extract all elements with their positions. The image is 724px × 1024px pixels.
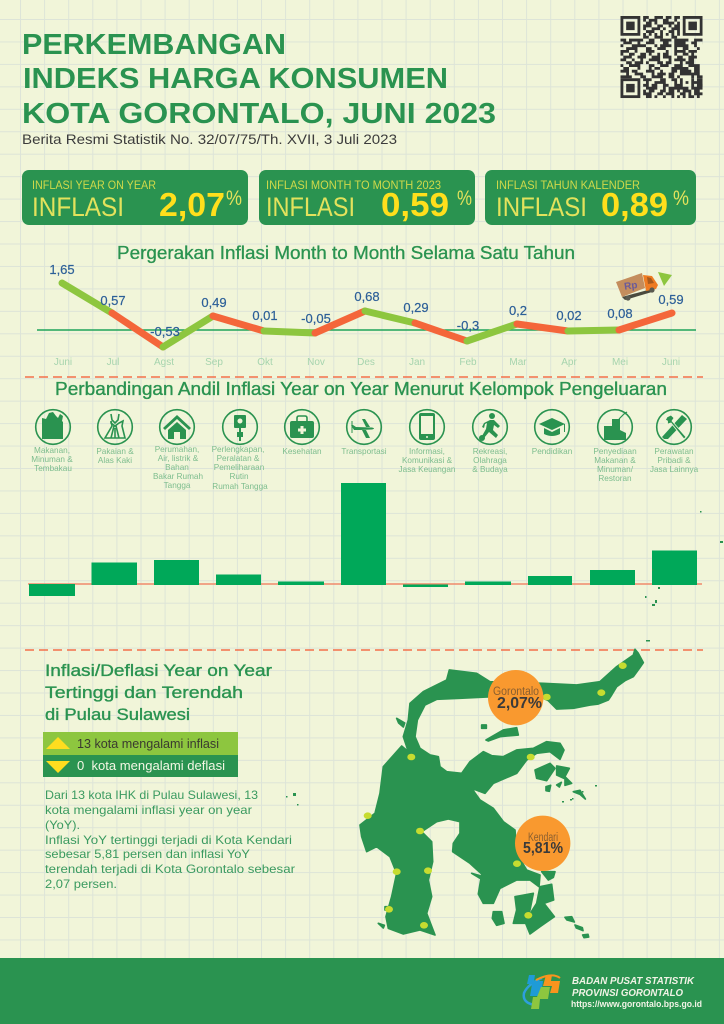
- icon: truck: Rp: [624, 280, 638, 293]
- title: INDEKS HARGA KONSUMEN: [23, 63, 448, 95]
- line chart: inflasi month to month: Jan: [409, 357, 425, 368]
- footer: PROVINSI GORONTALO: [572, 987, 683, 999]
- icon: rekreasi: [473, 410, 507, 444]
- footer: BADAN PUSAT STATISTIK: [572, 975, 695, 987]
- callout: Gorontalo: 2,07%: [497, 695, 542, 712]
- line chart: inflasi month to month: Feb: [459, 357, 477, 368]
- icon labels: Pakaian &: [96, 447, 134, 456]
- icon labels: Bakar Rumah: [153, 472, 203, 481]
- line chart: inflasi month to month: Des: [357, 357, 375, 368]
- icon row: kelompok pengeluaran: [36, 410, 691, 444]
- panel: inflasi year on year: [22, 170, 248, 225]
- icon: kesehatan: [285, 410, 319, 444]
- line chart: inflasi month to month: 0,57: [100, 293, 126, 308]
- heading: sulawesi: Tertinggi dan Terendah: [45, 684, 243, 702]
- line chart: inflasi month to month: Nov: [307, 357, 325, 368]
- panel: inflasi year on year: INFLASI: [32, 192, 124, 222]
- icon labels: Rekreasi,: [473, 447, 507, 456]
- icon: QR code: [620, 17, 705, 97]
- text block: ringkasan: [45, 788, 295, 891]
- panel: inflasi tahun kalender: [485, 170, 696, 225]
- legend: 0 kota mengalami deflasi: [77, 759, 225, 773]
- panel: inflasi year on year: %: [226, 187, 242, 210]
- line chart: inflasi month to month: -0,53: [150, 324, 180, 339]
- panel: inflasi month to month: [259, 170, 475, 225]
- legend: [43, 732, 238, 777]
- panel: inflasi tahun kalender: INFLASI: [496, 192, 587, 222]
- icon labels: Rutin: [229, 472, 249, 481]
- heading: sulawesi: Inflasi/Deflasi Year on Year: [45, 662, 273, 680]
- line chart: inflasi month to month: 0,68: [354, 289, 380, 304]
- panel: inflasi month to month: INFLASI MONTH TO MONTH 2023: [266, 178, 441, 192]
- callout: Kendari: 5,81%: [523, 840, 563, 857]
- map specks: pulau kecil: [286, 511, 723, 806]
- bar chart: andil inflasi: [28, 483, 702, 596]
- icon labels: Bahan: [165, 463, 189, 472]
- icon: pakaian: [98, 410, 132, 444]
- line chart: inflasi month to month: Juni: [54, 357, 72, 368]
- line chart: inflasi month to month: -0,05: [301, 311, 331, 326]
- callout: Kendari: [515, 816, 570, 871]
- heading: sulawesi: di Pulau Sulawesi: [45, 706, 190, 724]
- legend: 13 kota mengalami inflasi: [77, 737, 219, 751]
- arrow: up: [658, 272, 672, 286]
- icon: truck: [616, 273, 658, 301]
- title: KOTA GORONTALO, JUNI 2023: [22, 98, 496, 130]
- text block: ringkasan: 2,07 persen.: [45, 877, 117, 891]
- icon labels: Olahraga: [473, 456, 507, 465]
- line chart: inflasi month to month: -0,3: [457, 318, 479, 333]
- line chart: inflasi month to month: Agst: [154, 357, 174, 368]
- line chart: inflasi month to month: 0,02: [556, 308, 582, 323]
- panel: inflasi year on year: 2,07: [159, 186, 225, 223]
- icon labels: Tangga: [164, 481, 191, 490]
- panel: inflasi tahun kalender: 0,89: [601, 186, 668, 223]
- icon labels: Minuman/: [597, 465, 634, 474]
- footer: https://www.gorontalo.bps.go.id: [571, 999, 702, 1010]
- text block: ringkasan: terendah terjadi di Kota Gorontalo sebesar: [45, 862, 295, 876]
- panel: inflasi tahun kalender: %: [673, 187, 689, 210]
- icon labels: Komunikasi &: [402, 456, 453, 465]
- text block: ringkasan: sebesar 5,81 persen dan inflasi YoY: [45, 847, 250, 861]
- panel: inflasi month to month: 0,59: [381, 186, 449, 223]
- map markers: kota IHK: [364, 662, 627, 929]
- icon labels: Perawatan: [654, 447, 694, 456]
- icon labels: Penyediaan: [593, 447, 637, 456]
- footer: [0, 958, 724, 1024]
- icon labels: Pribadi &: [657, 456, 691, 465]
- icon labels: Minuman &: [31, 455, 73, 464]
- line chart: inflasi month to month: Mar: [509, 357, 527, 368]
- map: Pulau Sulawesi: [360, 649, 643, 938]
- icon labels: Restoran: [598, 474, 632, 483]
- line chart: inflasi month to month: 0,29: [403, 300, 429, 315]
- icon: perlengkapan: [223, 410, 257, 444]
- line chart: inflasi month to month: 0,01: [252, 308, 278, 323]
- text block: ringkasan: (YoY).: [45, 818, 80, 832]
- icon labels: Air, listrik &: [158, 454, 199, 463]
- icon: perumahan: [160, 410, 194, 444]
- icon labels: Informasi,: [409, 447, 445, 456]
- icon labels: Jasa Keuangan: [399, 465, 456, 474]
- icon: transportasi: [347, 410, 381, 444]
- text block: ringkasan: kota mengalami inflasi year on year: [45, 803, 252, 817]
- icon: informasi: [410, 410, 444, 444]
- text block: ringkasan: Inflasi YoY tertinggi terjadi di Kota Kendari: [45, 833, 292, 847]
- icon: makanan: [36, 410, 70, 444]
- line chart: inflasi month to month: Jul: [107, 357, 119, 368]
- icon: BPS logo: [524, 975, 560, 1009]
- line chart: inflasi month to month: 0,59: [658, 292, 684, 307]
- title: [22, 29, 496, 130]
- line chart: inflasi month to month: Okt: [257, 357, 273, 368]
- panel: inflasi month to month: INFLASI: [266, 192, 355, 222]
- line chart: inflasi month to month: Sep: [205, 357, 223, 368]
- text block: ringkasan: Dari 13 kota IHK di Pulau Sulawesi, 13: [45, 788, 258, 802]
- icon labels: Kesehatan: [282, 447, 322, 456]
- icon labels: Pendidikan: [532, 447, 573, 456]
- heading: andil: Perbandingan Andil Inflasi Year on Year Menurut Kelompok Pengeluaran: [55, 379, 667, 399]
- title: PERKEMBANGAN: [22, 29, 286, 61]
- subtitle: Berita Resmi Statistik No. 32/07/75/Th. XVII, 3 Juli 2023: [22, 131, 397, 147]
- icon labels: [31, 445, 699, 491]
- line chart: inflasi month to month: Apr: [561, 357, 577, 368]
- icon labels: Jasa Lainnya: [650, 465, 699, 474]
- icon labels: Pemeliharaan: [214, 463, 265, 472]
- line chart: inflasi month to month: [37, 262, 696, 368]
- callout: Gorontalo: [488, 670, 543, 725]
- icon labels: Tembakau: [34, 464, 72, 473]
- panel: inflasi tahun kalender: INFLASI TAHUN KALENDER: [496, 178, 640, 192]
- icon labels: Peralatan &: [217, 454, 260, 463]
- icon labels: Perlengkapan,: [212, 445, 264, 454]
- heading: month to month: Pergerakan Inflasi Month to Month Selama Satu Tahun: [117, 243, 575, 263]
- line chart: inflasi month to month: 0,49: [201, 295, 227, 310]
- icon labels: & Budaya: [472, 465, 508, 474]
- icon labels: Transportasi: [341, 447, 387, 456]
- line chart: inflasi month to month: Mei: [612, 357, 628, 368]
- callout: Gorontalo: Gorontalo: [493, 686, 539, 698]
- icon labels: Makanan,: [34, 446, 70, 455]
- panel: inflasi year on year: INFLASI YEAR ON YEAR: [32, 178, 156, 192]
- icon: perawatan: [657, 410, 691, 444]
- icon labels: Rumah Tangga: [212, 482, 268, 491]
- icon labels: Makanan &: [594, 456, 636, 465]
- icon: penyediaan: [598, 410, 632, 444]
- panel: inflasi month to month: %: [457, 187, 472, 210]
- line chart: inflasi month to month: Juni: [662, 357, 680, 368]
- icon labels: Perumahan,: [155, 445, 199, 454]
- heading: sulawesi: [45, 662, 273, 724]
- line chart: inflasi month to month: 0,2: [509, 303, 527, 318]
- icon labels: Alas Kaki: [98, 456, 132, 465]
- line chart: inflasi month to month: 1,65: [49, 262, 75, 277]
- line chart: inflasi month to month: 0,08: [607, 306, 633, 321]
- callout: Kendari: Kendari: [528, 832, 558, 844]
- icon: pendidikan: [535, 410, 569, 444]
